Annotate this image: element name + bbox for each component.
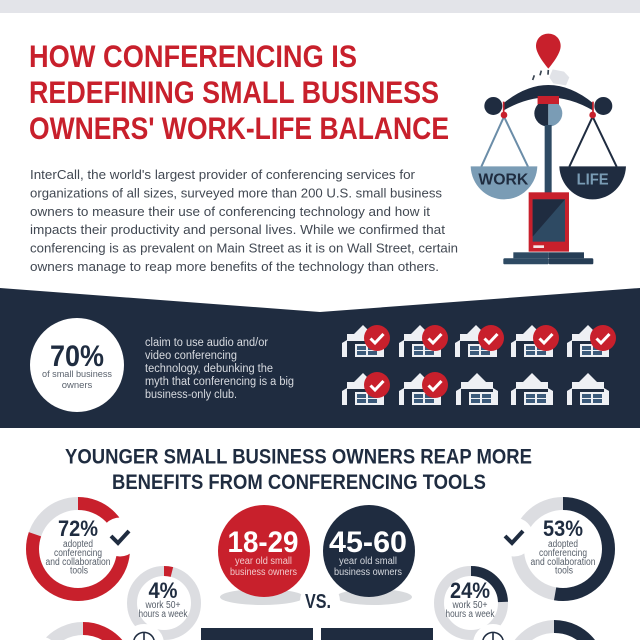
donut: 4% work 50+ hours: work 50+ [145, 600, 181, 611]
stat circle: 70%: 70% [50, 340, 104, 373]
donut: 53% adopted tools: conferencing [539, 548, 587, 559]
title [29, 38, 449, 146]
icon: clock right [473, 624, 513, 640]
donut: 53% adopted tools [494, 504, 608, 594]
age group badge: 45-60: year old small [339, 556, 397, 567]
section heading: YOUNGER SMALL BUSINESS OWNERS REAP MORE [65, 446, 532, 468]
donut: 4% work 50+ hours: hours a week [138, 609, 188, 620]
age group badge: 45-60 [323, 505, 415, 605]
donut: 53% adopted tools: tools [555, 566, 573, 576]
icon: balance scale work vs life: WORK [478, 172, 528, 189]
comparison panels, cropped at page edge [201, 628, 433, 640]
band description: business-only club. [145, 389, 237, 401]
donut: 72% adopted tools: tools [70, 566, 88, 576]
stat circle: 70%: owners [62, 380, 93, 391]
donut: 24% work 50+ hours [439, 571, 503, 635]
intro text: owners manage to reap more benefits of the technology than others. [30, 259, 439, 274]
stat circle: 70%: of small business [42, 369, 112, 380]
VS badge: VS. [305, 591, 331, 613]
donut: 72% adopted tools: and collaboration [46, 557, 110, 568]
age group badge: 18-29: business owners [230, 567, 297, 578]
intro text: organizations of all sizes, surveyed more than 200 U.S. small business [30, 186, 443, 200]
band description: technology, debunking the [145, 363, 273, 375]
VS badge [300, 581, 340, 621]
intro text [30, 167, 458, 274]
icon: balance scale work vs life: LIFE [577, 172, 609, 189]
donut: 24% work 50+ hours: 24% [450, 578, 490, 603]
age group badge: 18-29 [218, 505, 310, 605]
age group badge: 45-60: business owners [334, 567, 402, 578]
title: HOW CONFERENCING IS [29, 38, 357, 74]
donut: 72% adopted tools: 72% [58, 516, 98, 541]
donut: 53% adopted tools: and collaboration [530, 557, 596, 568]
donut: 4% work 50+ hours [132, 571, 196, 635]
donut: 53% adopted tools: adopted [548, 539, 578, 550]
panel: 70 percent dark band [0, 288, 640, 428]
donut: 53% adopted tools: 53% [543, 516, 583, 541]
section heading [65, 446, 532, 494]
band description [145, 337, 294, 401]
age group badge: 18-29: 18-29 [228, 526, 298, 559]
donut: lower left, cropped at page edge [29, 622, 122, 640]
intro text: impacts their productivity and personal lives. While we confirmed that [30, 222, 445, 237]
icon grid: small business houses, seven of ten checked [342, 325, 616, 405]
age group badge: 18-29: year old small [235, 556, 292, 567]
donut: 24% work 50+ hours: work 50+ [452, 600, 488, 611]
top bar [0, 0, 640, 13]
title: REDEFINING SMALL BUSINESS [29, 74, 439, 110]
donut: 72% adopted tools: adopted [63, 539, 93, 550]
intro text: owners to measure their use of conferencing technology and how it [30, 204, 430, 219]
stat circle: 70% [30, 318, 124, 412]
intro text: conferencing is as prevalent on Main Street as it is on Wall Street, certain [30, 240, 458, 256]
donut: 72% adopted tools: conferencing [54, 548, 102, 559]
band description: myth that conferencing is a big [145, 376, 294, 388]
band description: video conferencing [145, 350, 237, 362]
intro text: InterCall, the world's largest provider of conferencing services for [30, 167, 416, 182]
section heading: BENEFITS FROM CONFERENCING TOOLS [112, 471, 486, 494]
title: OWNERS' WORK-LIFE BALANCE [29, 110, 449, 146]
band description: claim to use audio and/or [145, 337, 268, 349]
age group badge: 45-60: 45-60 [329, 526, 407, 559]
donut: 72% adopted tools [32, 504, 140, 594]
icon: clock left [124, 624, 164, 640]
donut: lower right, cropped at page edge [515, 620, 595, 640]
donut: 4% work 50+ hours: 4% [148, 578, 178, 603]
donut: 24% work 50+ hours: hours a week [446, 609, 495, 620]
icon: balance scale work vs life [471, 34, 626, 264]
